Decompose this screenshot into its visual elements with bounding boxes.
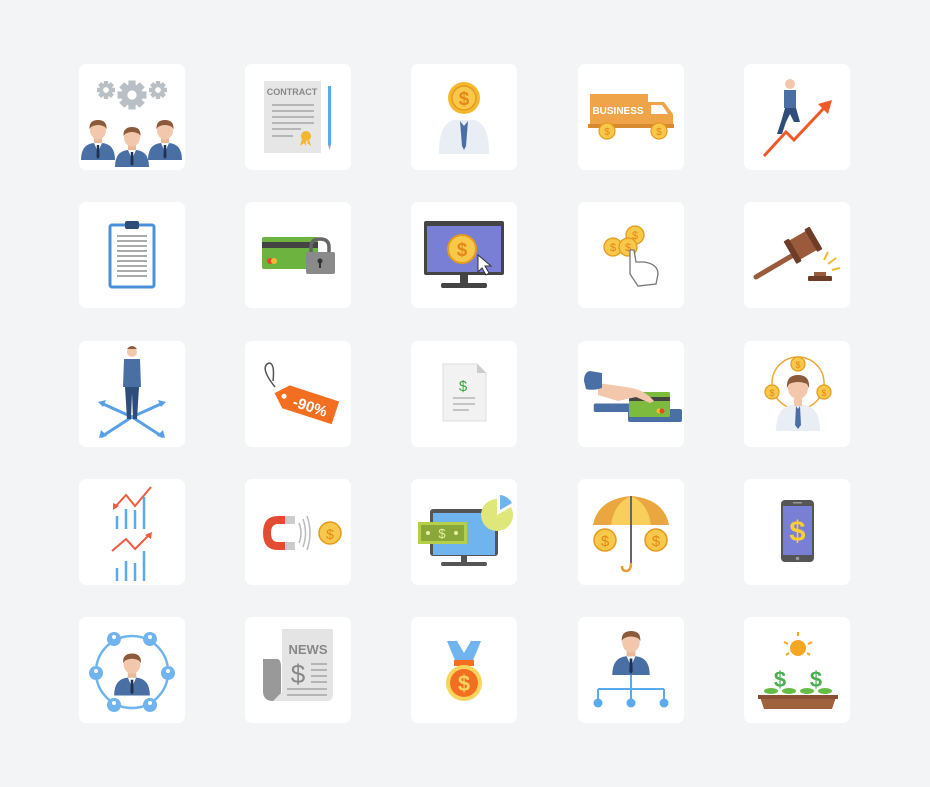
card 4: business truck: $ [656,127,662,138]
card 9: coins hand: $ [625,242,631,254]
card 1: team gears [79,64,185,170]
card 21: network people [79,617,185,723]
card 25: money plants [744,617,850,723]
card 14: hand with card [578,341,684,447]
card 13: document dollar: $ [459,378,468,395]
card 13: document dollar [411,341,517,447]
card 18: monitor money pie [411,479,517,585]
card 15: person with coins: $ [769,388,775,398]
card 15: person with coins: $ [795,360,801,370]
card 19: umbrella coins: $ [652,533,661,550]
card 18: monitor money pie: $ [438,526,446,541]
card 19: umbrella coins [578,479,684,585]
card 4: business truck [578,64,684,170]
card 8: monitor with coin [411,202,517,308]
card 17: magnet coin [245,479,351,585]
card 19: umbrella coins: $ [601,533,610,550]
card 4: business truck: $ [604,127,610,138]
card 25: money plants: $ [774,667,786,692]
card 9: coins hand [578,202,684,308]
card 7: card with padlock [245,202,351,308]
card 17: magnet coin: $ [326,526,334,542]
card 9: coins hand: $ [610,242,616,254]
card 22: newspaper [245,617,351,723]
card 15: person with coins: $ [821,388,827,398]
card 22: newspaper: NEWS [288,642,328,657]
card 3: dollar head: $ [459,89,470,110]
card 4: business truck: BUSINESS [592,106,644,117]
card 22: newspaper: $ [291,659,306,689]
card 20: phone dollar: $ [789,516,806,548]
card 5: man climbing arrow [744,64,850,170]
card 8: monitor with coin: $ [457,240,468,261]
card 6: clipboard [79,202,185,308]
card 24: org chart [578,617,684,723]
card 2: contract: CONTRACT [267,87,318,97]
card 23: medal: $ [458,671,470,696]
card 3: dollar head [411,64,517,170]
card 15: person with coins [744,341,850,447]
card 12: discount tag [245,341,351,447]
card 25: money plants: $ [810,667,822,692]
card 11: man with arrows [79,341,185,447]
card 10: gavel [744,202,850,308]
card 2: contract [245,64,351,170]
card 12: discount tag: -90% [291,394,329,421]
card 23: medal [411,617,517,723]
card 9: coins hand: $ [632,230,638,242]
card 16: bar charts [79,479,185,585]
card 20: phone dollar [744,479,850,585]
